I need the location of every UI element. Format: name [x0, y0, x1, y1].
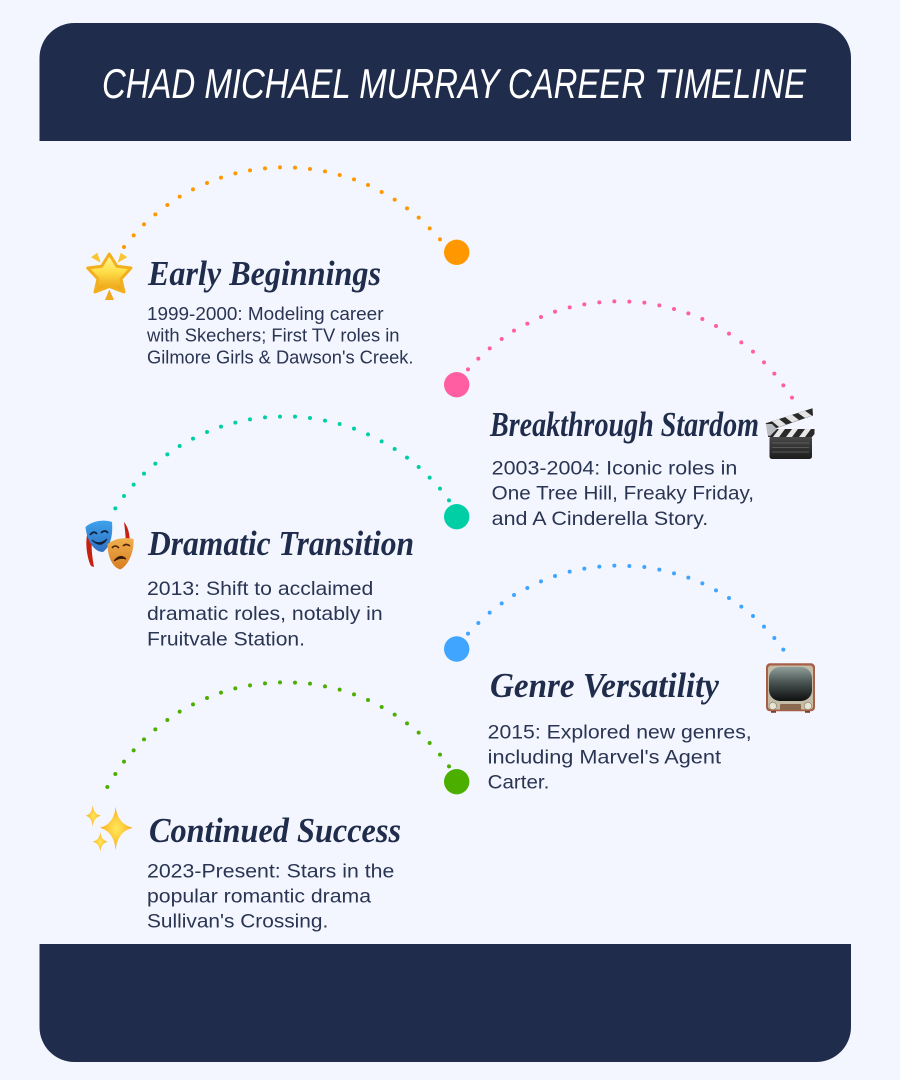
- description: 2023-Present: Stars in the: [147, 860, 394, 882]
- heading: Breakthrough Stardom: [489, 405, 759, 444]
- milestone: Early Beginnings: [88, 165, 469, 367]
- description: [147, 860, 394, 932]
- description: Fruitvale Station.: [147, 629, 305, 651]
- footer banner: [40, 944, 851, 1062]
- timeline node: blue: [444, 636, 469, 662]
- milestone: Genre Versatility: [444, 564, 815, 793]
- description: 2003-2004: Iconic roles in: [492, 457, 737, 479]
- icon: clapper board: [766, 408, 814, 459]
- heading: Genre Versatility: [490, 666, 719, 705]
- header banner: [40, 23, 851, 141]
- timeline node: pink: [444, 372, 469, 397]
- description: Gilmore Girls & Dawson's Creek.: [147, 347, 414, 367]
- dotted arc: green: [105, 680, 451, 789]
- description: and A Cinderella Story.: [492, 508, 708, 530]
- icon: television: [766, 663, 815, 713]
- dotted arc: blue: [466, 564, 785, 652]
- milestone: Dramatic Transition: [86, 415, 469, 651]
- icon: sparkles: [86, 805, 133, 852]
- timeline node: teal: [444, 504, 469, 529]
- dotted arc: pink: [466, 299, 794, 400]
- dotted arc: teal: [113, 415, 451, 510]
- description: 2015: Explored new genres,: [488, 721, 752, 743]
- description: popular romantic drama: [147, 885, 371, 907]
- milestone: Breakthrough Stardom: [444, 299, 814, 530]
- description: [492, 457, 754, 530]
- description: dramatic roles, notably in: [147, 603, 383, 625]
- timeline node: green: [444, 769, 469, 794]
- heading: Early Beginnings: [147, 254, 381, 293]
- description: with Skechers; First TV roles in: [146, 326, 400, 346]
- heading: Continued Success: [149, 811, 401, 850]
- description: Sullivan's Crossing.: [147, 910, 328, 932]
- description: [147, 578, 383, 651]
- icon: theater masks: [86, 521, 134, 570]
- timeline node: orange: [444, 240, 469, 265]
- icon: glowing star: [88, 253, 131, 300]
- heading: Dramatic Transition: [147, 524, 414, 563]
- description: 2013: Shift to acclaimed: [147, 578, 373, 600]
- description: One Tree Hill, Freaky Friday,: [492, 483, 754, 505]
- description: 1999-2000: Modeling career: [147, 304, 384, 324]
- description: including Marvel's Agent: [488, 746, 722, 768]
- description: [488, 721, 752, 793]
- milestone: Continued Success: [86, 680, 469, 932]
- description: Carter.: [488, 771, 549, 793]
- dotted arc: orange: [122, 165, 442, 249]
- description: [146, 304, 413, 367]
